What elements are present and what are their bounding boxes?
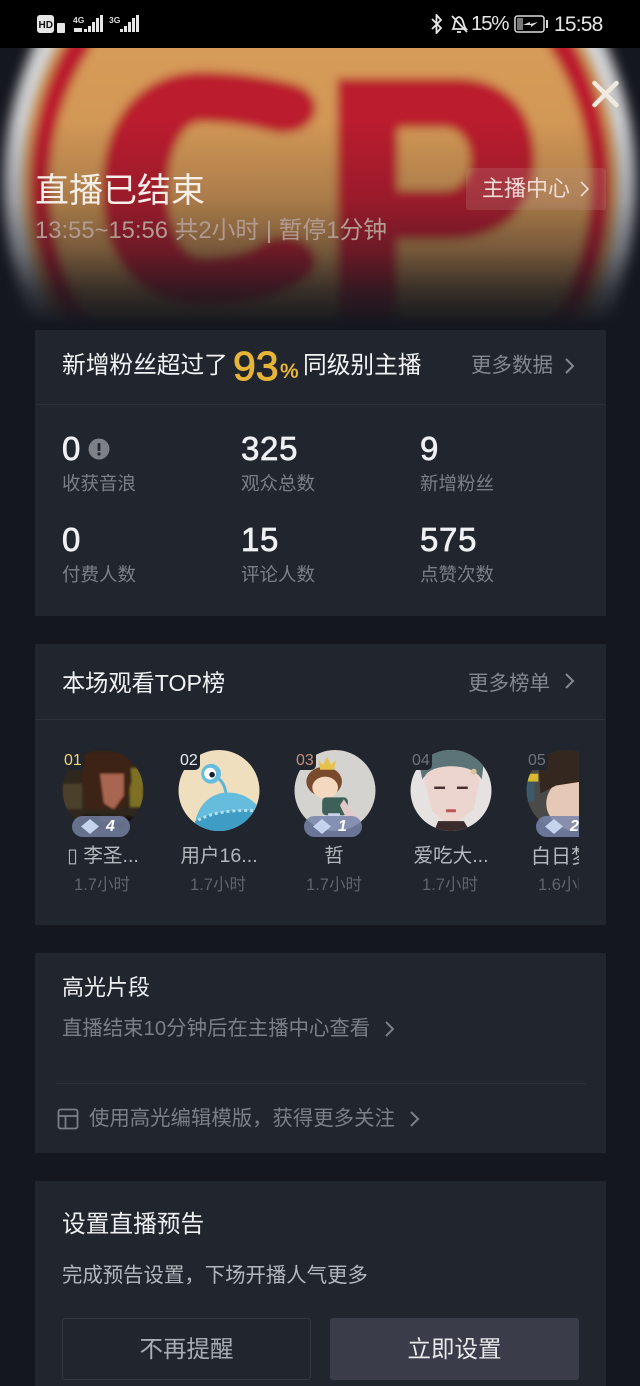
stat: 新增粉丝: 新增粉丝 [420,473,494,494]
heading: fans percentile: 93 [233,343,279,389]
viewer 1 avatar [62,750,144,822]
stat: 观众总数: 325 [241,430,298,467]
icon: template [58,1108,78,1130]
viewer 3 time: 1.7小时 [306,876,362,894]
stat: 付费人数: 0 [62,521,81,558]
heading: 高光片段 [62,975,150,1000]
viewer 5 rank: 05 [528,752,546,769]
button: set now [330,1318,579,1380]
button: dismiss: 不再提醒 [140,1336,234,1362]
viewer 1 time: 1.7小时 [74,876,130,894]
viewer 4 avatar [410,750,492,831]
stat: 评论人数: 15 [241,521,279,558]
stat: 付费人数 [62,521,136,585]
stat: 新增粉丝: 9 [420,430,439,467]
viewer 2 name: 用户16... [180,845,258,867]
status icons left: HD and signal: 3G [109,15,121,25]
anchor center button: 主播中心 [482,176,570,201]
stat: 付费人数: 付费人数 [62,564,136,585]
heading: 本场观看TOP榜 [62,670,225,696]
viewer 3 rank: 03 [296,752,314,769]
viewer 1 name: ▯ 李圣... [67,845,139,867]
status bar [0,0,640,48]
heading: fans percentile: 同级别主播 [303,353,421,379]
highlights note: 直播结束10分钟后在主播中心查看 [62,1018,370,1040]
viewer 3 level badge [304,816,362,837]
stat: 收获音浪: 0 [62,430,81,467]
button: set now: 立即设置 [408,1336,502,1362]
chevron [385,1021,394,1037]
viewer 2 rank: 02 [180,752,198,769]
viewer 4 time: 1.7小时 [422,876,478,894]
status icons left: HD and signal: 4G [73,15,85,25]
panel: highlights [35,953,606,1153]
heading: fans percentile: % [280,360,299,383]
status icons left: HD and signal [37,15,139,33]
status icons right: bluetooth, mute [431,14,468,34]
viewer 5 avatar [526,750,579,830]
viewer 4 name: 爱吃大... [413,845,489,867]
close icon [592,80,619,108]
heading: fans percentile: 新增粉丝超过了 [62,353,228,379]
description: 完成预告设置，下场开播人气更多 [62,1265,368,1287]
viewer 5 level badge: 2 [570,818,579,835]
viewer 2 avatar [178,750,260,831]
stat: 收获音浪 [62,430,136,494]
viewer 2 time: 1.7小时 [190,876,246,894]
hero background: blurred CP logo [0,48,640,317]
stat: 评论人数 [241,521,315,585]
panel: live preview [35,1181,606,1386]
button: dismiss [62,1318,311,1380]
stat: 新增粉丝 [420,430,494,494]
panel: top viewers [35,644,606,925]
more data link: 更多数据 [471,354,553,377]
viewer 1 level badge [72,816,130,837]
heading: 设置直播预告 [62,1212,204,1238]
viewer 1 rank: 01 [64,752,82,769]
template promo text: 使用高光编辑模版，获得更多关注 [89,1108,395,1130]
anchor center button [466,168,606,210]
clock: 15:58 [554,13,603,36]
more rankings link: 更多榜单 [468,672,550,695]
battery percent: 15% [471,12,508,35]
chevron [565,358,574,374]
stat: 点赞次数: 点赞次数 [420,564,494,585]
stat: 点赞次数 [420,521,494,585]
panel: stats [35,330,606,616]
stat: 收获音浪: 收获音浪 [62,473,136,494]
chevron [565,673,574,689]
viewer 3 name: 哲 [324,845,344,867]
heading: fans percentile [62,343,421,389]
viewer 4 rank: 04 [412,752,430,769]
viewer 3 avatar [294,750,376,831]
viewer 3 level badge: 1 [338,818,347,835]
chevron [580,182,589,196]
viewer 1 level badge: 4 [106,818,115,835]
subtitle: time range: 13:55~15:56 共2小时 | 暂停1分钟 [35,217,387,244]
stat: 观众总数: 观众总数 [241,473,315,494]
status icons left: HD and signal: HD [38,20,53,31]
battery icon [514,15,548,33]
stat: 点赞次数: 575 [420,521,477,558]
chevron [410,1111,420,1127]
stat: 观众总数 [241,430,315,494]
title: 直播已结束 [35,172,205,210]
viewer 5 clipped column [526,750,579,894]
stat: 评论人数: 评论人数 [241,564,315,585]
viewer 5 level badge [536,816,594,837]
